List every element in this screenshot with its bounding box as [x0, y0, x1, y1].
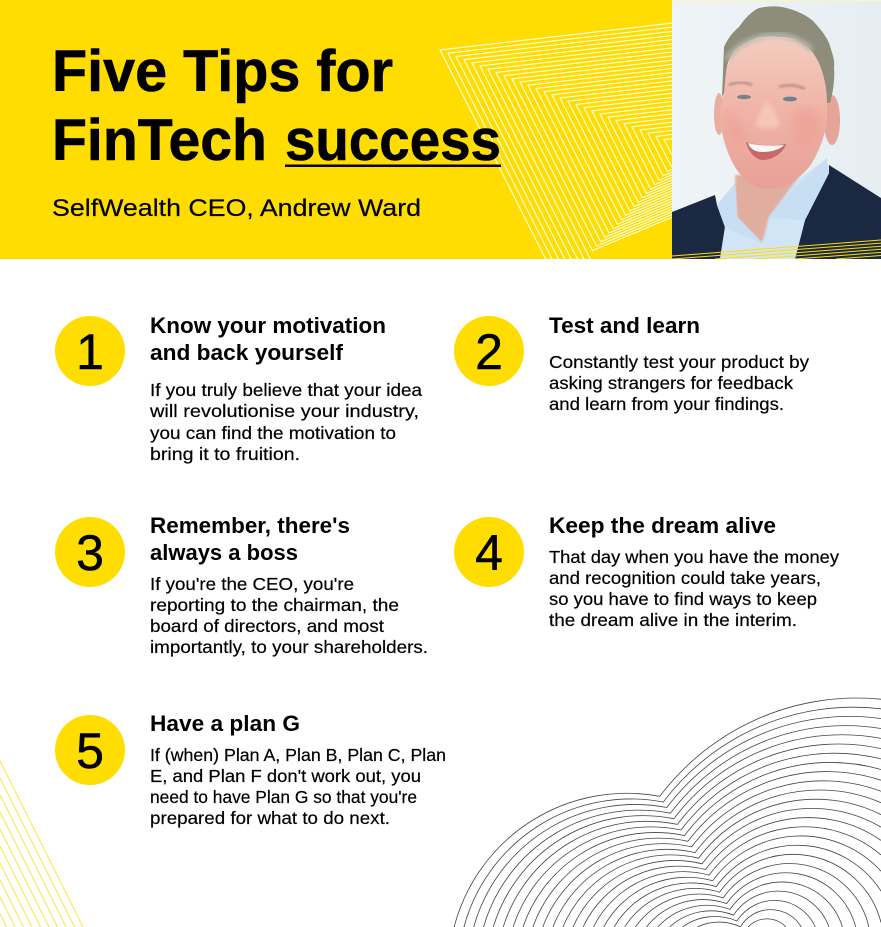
tip 4 body	[549, 547, 839, 630]
mouth	[746, 142, 786, 160]
photo accent lines	[672, 240, 881, 259]
tip 1 body	[149, 380, 422, 464]
jacket	[672, 165, 881, 259]
collar	[717, 158, 829, 243]
decoration: bottom-left yellow lines	[0, 761, 83, 927]
decoration: bottom-right contour lines	[454, 698, 881, 927]
face	[720, 38, 827, 189]
eyes	[737, 95, 751, 99]
tip 4 body: and recognition could take years,	[549, 568, 821, 588]
tip 3 body: If you're the CEO, you're	[150, 574, 354, 594]
tip 3 body: importantly, to your shareholders.	[150, 637, 428, 657]
tip 5 body: E, and Plan F don't work out, you	[150, 766, 421, 786]
subtitle: SelfWealth CEO, Andrew Ward	[52, 195, 421, 222]
number badge 1	[55, 316, 125, 386]
number badge 2: 2	[475, 324, 503, 380]
title: success	[285, 108, 501, 173]
tip 1 heading: Know your motivation	[150, 313, 386, 338]
number badge 5: 5	[76, 723, 104, 779]
tip 5 body	[150, 745, 446, 828]
tip 5 body: need to have Plan G so that you're	[150, 787, 417, 807]
title: Five Tips for	[52, 39, 393, 104]
title: FinTech	[52, 108, 267, 173]
tip 4	[454, 513, 839, 630]
header banner	[0, 0, 672, 259]
tip 3 body	[150, 574, 428, 657]
tip 5 body: If (when) Plan A, Plan B, Plan C, Plan	[150, 745, 446, 765]
tip 1 heading: and back yourself	[150, 340, 344, 365]
number badge 4	[454, 517, 524, 587]
tip 2 body	[549, 352, 809, 414]
tip 3	[55, 513, 428, 657]
tip 2 body: and learn from your findings.	[549, 394, 784, 414]
number badge 1: 1	[76, 324, 104, 380]
number badge 5	[55, 715, 125, 785]
portrait photo	[672, 0, 881, 259]
tip 5 heading: Have a plan G	[150, 711, 300, 736]
hair	[722, 6, 834, 103]
number badge 2	[454, 316, 524, 386]
cheeks	[728, 110, 819, 142]
number badge 4: 4	[475, 525, 503, 581]
tip 3 body: board of directors, and most	[150, 616, 384, 636]
number badge 3: 3	[76, 525, 104, 581]
tip 3 heading	[150, 513, 350, 565]
nose	[755, 102, 780, 129]
tip 1	[55, 313, 422, 464]
shirt	[717, 158, 829, 259]
tip 4 body: That day when you have the money	[549, 547, 839, 567]
number badge 3	[55, 517, 125, 587]
tip 3 heading: always a boss	[150, 540, 298, 565]
tip 4 heading: Keep the dream alive	[549, 513, 776, 538]
tip 4 body: the dream alive in the interim.	[549, 610, 797, 630]
tip 3 heading: Remember, there's	[150, 513, 350, 538]
brows	[729, 82, 805, 89]
title	[52, 39, 501, 173]
tip 5	[55, 711, 446, 828]
tip 1 body: will revolutionise your industry,	[149, 401, 419, 421]
tip 2 body: asking strangers for feedback	[549, 373, 793, 393]
tip 2 body: Constantly test your product by	[549, 352, 809, 372]
header line pattern	[440, 23, 672, 259]
tip 4 body: so you have to find ways to keep	[549, 589, 817, 609]
tip 1 body: bring it to fruition.	[150, 444, 300, 464]
ears	[714, 93, 722, 135]
tip 1 body: you can find the motivation to	[150, 423, 396, 443]
tip 2 heading: Test and learn	[549, 313, 700, 338]
tip 5 body: prepared for what to do next.	[150, 808, 390, 828]
tip 1 heading	[150, 313, 386, 365]
tip 1 body: If you truly believe that your idea	[150, 380, 422, 400]
tip 2	[454, 313, 809, 414]
neck	[735, 175, 800, 243]
tip 3 body: reporting to the chairman, the	[150, 595, 399, 615]
